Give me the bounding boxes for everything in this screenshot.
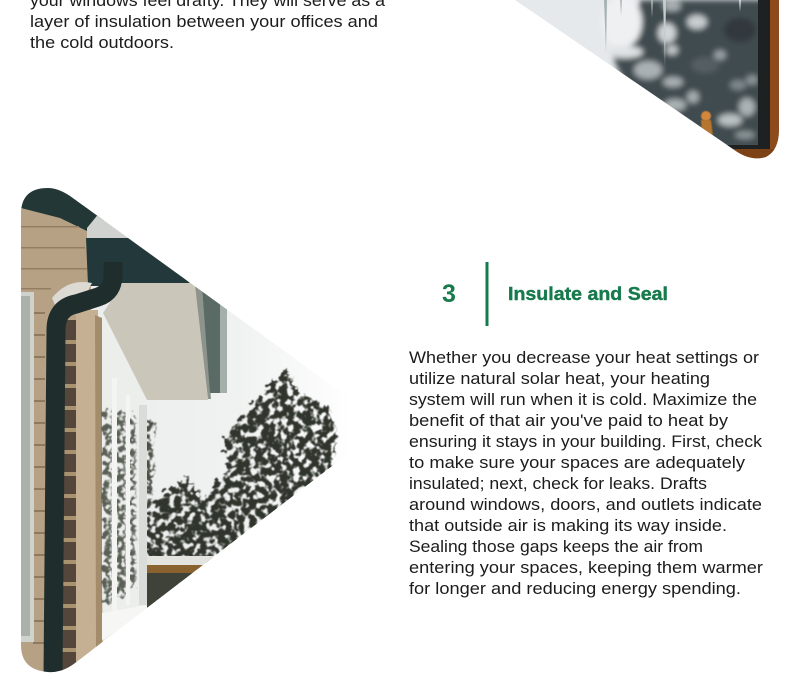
text block: insulate and seal body: for longer and reducing energy spending.	[409, 579, 741, 598]
text block: insulate and seal body: Sealing those gaps keeps the air from	[409, 537, 703, 556]
photo: house corner with gutter and trees, cut as a triangle	[21, 188, 340, 672]
text block: end of previous section: layer of insulation between your offices and	[30, 12, 378, 31]
text block: insulate and seal body	[409, 348, 763, 598]
vertical divider	[486, 262, 488, 326]
text block: end of previous section: the cold outdoors.	[30, 33, 174, 52]
text block: insulate and seal body: around windows, doors, and outlets indicate	[409, 495, 762, 514]
heading text: Insulate and Seal	[508, 283, 668, 304]
text block: insulate and seal body: Whether you decrease your heat settings or	[409, 348, 759, 367]
upper wall	[21, 209, 88, 282]
photo: icicles at a window, cut as a triangle	[516, 0, 779, 158]
soffit	[103, 283, 208, 400]
white window frames	[103, 313, 147, 637]
text block: insulate and seal body: that outside air is making its way inside.	[409, 516, 727, 535]
text block: insulate and seal body: utilize natural solar heat, your heating	[409, 369, 710, 388]
section heading: 3 Insulate and Seal	[442, 262, 668, 326]
downpipe	[53, 262, 113, 675]
text block: insulate and seal body: benefit of that air you've paid to heat by	[409, 411, 729, 430]
number 3: 3	[442, 280, 456, 308]
text block: insulate and seal body: to make sure your spaces are adequately	[409, 453, 746, 472]
dark strip beside the downpipe	[60, 320, 77, 675]
text block: insulate and seal body: system will run when it is cold. Maximize the	[409, 390, 757, 409]
text block: insulate and seal body: entering your spaces, keeping them warmer	[409, 558, 763, 577]
fascia	[195, 285, 211, 399]
left wall siding	[21, 205, 91, 675]
text block: end of previous section	[30, 0, 386, 52]
text block: insulate and seal body: insulated; next, check for leaks. Drafts	[409, 474, 707, 493]
light patch above the pipe bend	[52, 282, 92, 305]
corner board	[76, 310, 103, 665]
text block: insulate and seal body: ensuring it stays in your building. First, check	[409, 432, 763, 451]
upper dark roof edge	[21, 188, 104, 231]
left window	[21, 292, 34, 642]
trees	[147, 368, 338, 612]
